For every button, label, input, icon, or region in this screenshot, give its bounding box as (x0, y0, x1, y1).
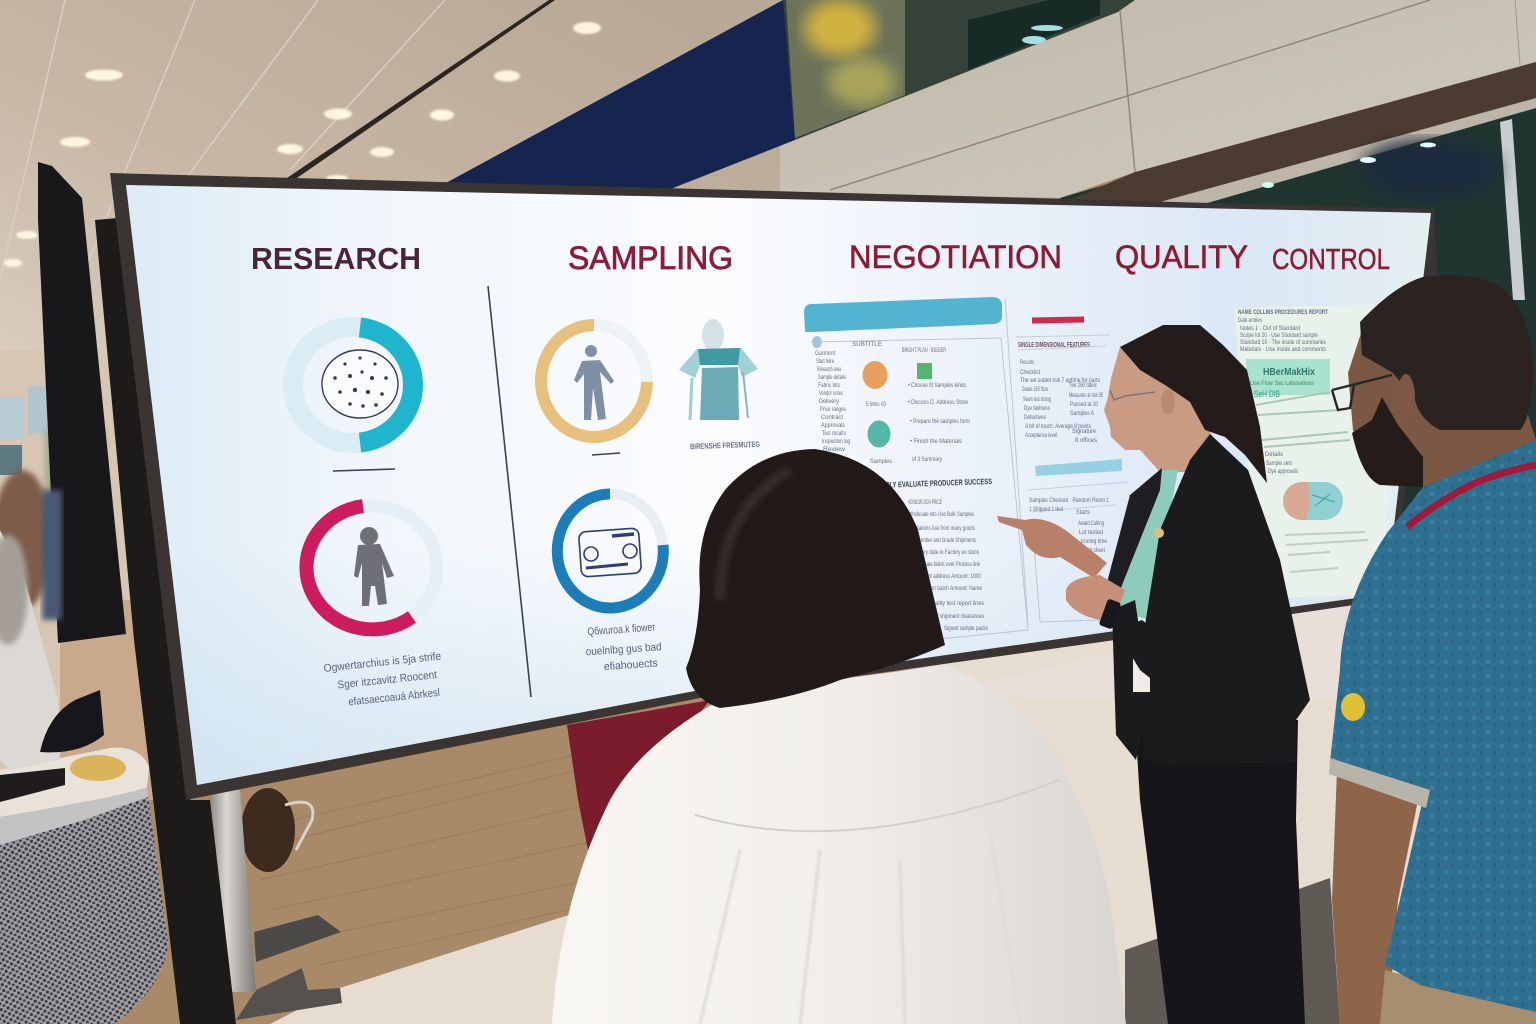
icon: gray person (354, 527, 394, 606)
document text: Test results (822, 431, 846, 437)
icon: blue-gray person (574, 345, 614, 420)
person: presenter (997, 325, 1310, 1024)
document paragraph: Wholesale lots Use Bulk Samples (908, 512, 974, 518)
mint highlight box: Use Flow Sec Laborations (1250, 381, 1314, 387)
divider line (488, 286, 531, 697)
quality panel at right: Standard 10 · The inside of summaries (1240, 340, 1326, 346)
quality list: Seam test strong (1023, 397, 1051, 403)
panel diagram: pill (1283, 482, 1343, 520)
display screen (126, 185, 1431, 785)
research caption: Sger itzcavitz Roocent (337, 669, 438, 691)
quality panel at right: Materials · Use inside and comments (1240, 347, 1326, 353)
document text: of 3 Summary (912, 457, 942, 463)
document text: Vendor notes (819, 391, 843, 397)
blue shirt (1330, 440, 1536, 1012)
document text: • Finish the Materials (910, 439, 962, 445)
research caption (323, 651, 445, 711)
research caption: Ogwertarchius is 5ja strife (323, 651, 442, 675)
document outline (811, 338, 1028, 640)
quality list: Dye fastness (1024, 406, 1050, 412)
negotiation document (804, 297, 1028, 640)
quality list: A bit of touch. Average 8 points (1025, 424, 1091, 430)
floor: wood deck (0, 680, 720, 1024)
sleeve trim (1329, 758, 1430, 808)
document text: Delivery (819, 399, 839, 405)
quality list: Defectives (1024, 415, 1046, 421)
quality table: Starts (1076, 510, 1090, 516)
garment icon (679, 319, 758, 420)
document text: • Prepare the samples form (910, 419, 970, 425)
document paragraph: Quality test report lines (928, 601, 984, 607)
document text: SUBTITLE (852, 342, 882, 348)
teal blouse (1112, 470, 1178, 620)
mint highlight box (1246, 359, 1330, 399)
document text: Research area (817, 367, 841, 373)
quality list: Results (1020, 360, 1034, 366)
panel text: NAME COLLINS PROCEDURES REPORT (1238, 310, 1328, 316)
quality list: Acceptance level (1025, 433, 1057, 439)
quality table: Fold sheet (1083, 548, 1105, 554)
document paragraph: Final shipment clearances (928, 614, 984, 620)
ear (1397, 374, 1415, 422)
sampling caption: Qбwuroa.k fiower (587, 622, 656, 638)
quality panel at right: Notes 1 · Out of Standard (1240, 326, 1300, 332)
quality list: Signature (1072, 429, 1097, 435)
pointing hand (997, 516, 1107, 578)
glasses (1332, 375, 1392, 410)
background visitors at left (0, 470, 104, 770)
white blouse (552, 665, 1126, 1024)
arm (1332, 770, 1420, 1024)
quality panel at right: Details (1265, 452, 1283, 458)
short rule under research ring (333, 469, 395, 471)
document text: Sample details (818, 375, 846, 381)
ponytail and hair (1120, 325, 1267, 483)
icon: dotted dish (322, 350, 398, 418)
display stand: dark post (95, 218, 236, 1024)
document paragraph: Wholesale fabric over Process line (912, 562, 980, 568)
red curtain behind display (567, 700, 710, 860)
hair (1360, 275, 1533, 430)
research ring: crimson with person (305, 506, 437, 630)
short rule under gold ring (592, 453, 620, 455)
background: right windows (1060, 60, 1536, 540)
quality list: Samples 6 (1070, 411, 1095, 417)
background: ceiling with lights (0, 0, 800, 500)
document header bar (804, 297, 1002, 332)
quality table: Samples Checked · Random Room 1 (1029, 498, 1110, 504)
background: left wall and far windows (0, 350, 180, 900)
document text (815, 342, 970, 465)
quality panel at right: Scope lot 20 · Use Standard sample (1240, 333, 1319, 339)
teal circle (868, 420, 890, 448)
quality table: Lot tested (1079, 530, 1103, 536)
document paragraph: Delivery date in Factory ex stock (911, 550, 980, 556)
sampling caption (584, 621, 663, 674)
quality list: Grade 150 Size (1022, 387, 1048, 393)
glasses (1110, 390, 1155, 400)
badge pin (1154, 528, 1164, 538)
document text: Contract (821, 415, 843, 421)
document text: 5 Mins 03 (866, 402, 887, 408)
ceiling slot (287, 0, 555, 180)
heading: CONTROL: CONTROL (1272, 244, 1390, 276)
quality heading: SINGLE DIMENSIONAL FEATURES (1018, 342, 1090, 349)
quality document (1005, 298, 1128, 625)
display stand: silver pole (210, 790, 256, 992)
neck and face (1348, 327, 1536, 487)
quality list (1020, 360, 1103, 444)
red label (1032, 317, 1084, 323)
icon: card (579, 528, 642, 577)
red lanyard (1407, 465, 1536, 527)
document paragraph: Signed sample packs (944, 626, 988, 632)
research ring: teal with dotted dish (293, 327, 413, 443)
wrist watch (1099, 598, 1121, 630)
document paragraph: Quotations Ask from many goods (909, 526, 975, 532)
yellow shirt logo (1341, 693, 1365, 721)
document paragraph: Inspection batch Amount: Name (914, 586, 983, 592)
quality panel at right: Date entries (1238, 318, 1262, 324)
document text: Price ranges (820, 407, 846, 413)
floor: pale tiles (270, 600, 1536, 1024)
quality list: The set sublet risk 7 uptime for parts (1020, 378, 1100, 384)
brown bag on floor (241, 788, 313, 872)
table with mesh base (0, 748, 168, 1024)
background: pale wall panels (780, 0, 1536, 198)
document paragraph: Lot number and Grade Shipments (910, 538, 976, 544)
side monitor (38, 162, 126, 643)
document text: • Discuss D. Address Store (908, 400, 969, 406)
heading: QUALITY: QUALITY (1115, 239, 1248, 275)
document text: BRIGHT PLAN · BIGGER (902, 348, 946, 354)
ceiling lights (4, 22, 601, 267)
orange circle (862, 361, 888, 389)
quality list: Checklist (1020, 370, 1040, 376)
document text: Start here (816, 359, 834, 365)
document section heading: SUPPLY EVALUATE PRODUCER SUCCESS (874, 477, 993, 490)
quality list: Passed at 10 (1070, 402, 1099, 408)
heading: SAMPLING: SAMPLING (568, 240, 733, 276)
sampling ring: gold with person (541, 325, 647, 437)
beard (1352, 397, 1423, 487)
dark hair (686, 449, 945, 708)
document text: Review (823, 447, 846, 453)
display frame (110, 173, 1438, 800)
research caption: efatsaecoauá Abrkesl (348, 687, 441, 708)
black jacket (1142, 434, 1310, 765)
document paragraph: Payment address Amount: 1000 (913, 574, 982, 580)
mint highlight box: SeH DIB (1254, 389, 1280, 399)
background: atrium windows with trees (783, 0, 1135, 140)
heading: RESEARCH: RESEARCH (251, 241, 421, 276)
quality panel at right (1234, 304, 1395, 598)
quality table (1028, 482, 1128, 554)
items on table (0, 755, 126, 802)
sampling caption: ouelnlbg gus bad (585, 641, 662, 658)
document paragraph: VENDOR 2024 PRICE (908, 500, 942, 506)
quality list: Tier 250 fabric (1069, 383, 1097, 389)
mint highlight box: HBerMakHix (1263, 367, 1315, 378)
quality table: 1 Shipped 1 test (1029, 507, 1063, 513)
face and neck (1104, 347, 1212, 472)
quality table: Award Cutting (1078, 521, 1104, 527)
person: man in blue shirt (1329, 275, 1536, 1024)
quality list: 8 offices (1075, 438, 1097, 444)
jacket sleeve (1116, 620, 1215, 690)
document text: Garment (815, 351, 835, 357)
quality panel at right: Sample sets (1266, 461, 1292, 467)
sampling ring: blue with card (557, 494, 663, 608)
ear (1161, 389, 1175, 415)
quality list: Measures at risk 85 (1069, 393, 1103, 399)
display stand: base plates (236, 915, 342, 1020)
document paragraph (908, 500, 988, 632)
blue label (1035, 459, 1122, 476)
green tile (917, 363, 932, 379)
document text: Inspection log (822, 439, 850, 445)
document text: • Choose fit Samples kinds (908, 383, 966, 389)
heading: NEGOTIATION: NEGOTIATION (849, 239, 1062, 275)
document text: Fabric lots (818, 383, 840, 389)
person: front woman in white (552, 449, 1126, 1024)
clasped hand (1066, 575, 1125, 620)
quality panel at right: Dye approvals (1268, 469, 1298, 475)
document text: Samples (870, 459, 892, 465)
sampling caption: efiahouects (603, 657, 659, 673)
garment caption: BIRENSHE FRESMUTEG (690, 440, 760, 451)
background: navy wall (444, 0, 800, 190)
quality table: Ironing time (1081, 539, 1108, 545)
lanyard card (1133, 640, 1150, 692)
khaki trousers (1380, 970, 1536, 1024)
trousers (1135, 720, 1305, 1024)
document text: Approvals (821, 423, 845, 429)
